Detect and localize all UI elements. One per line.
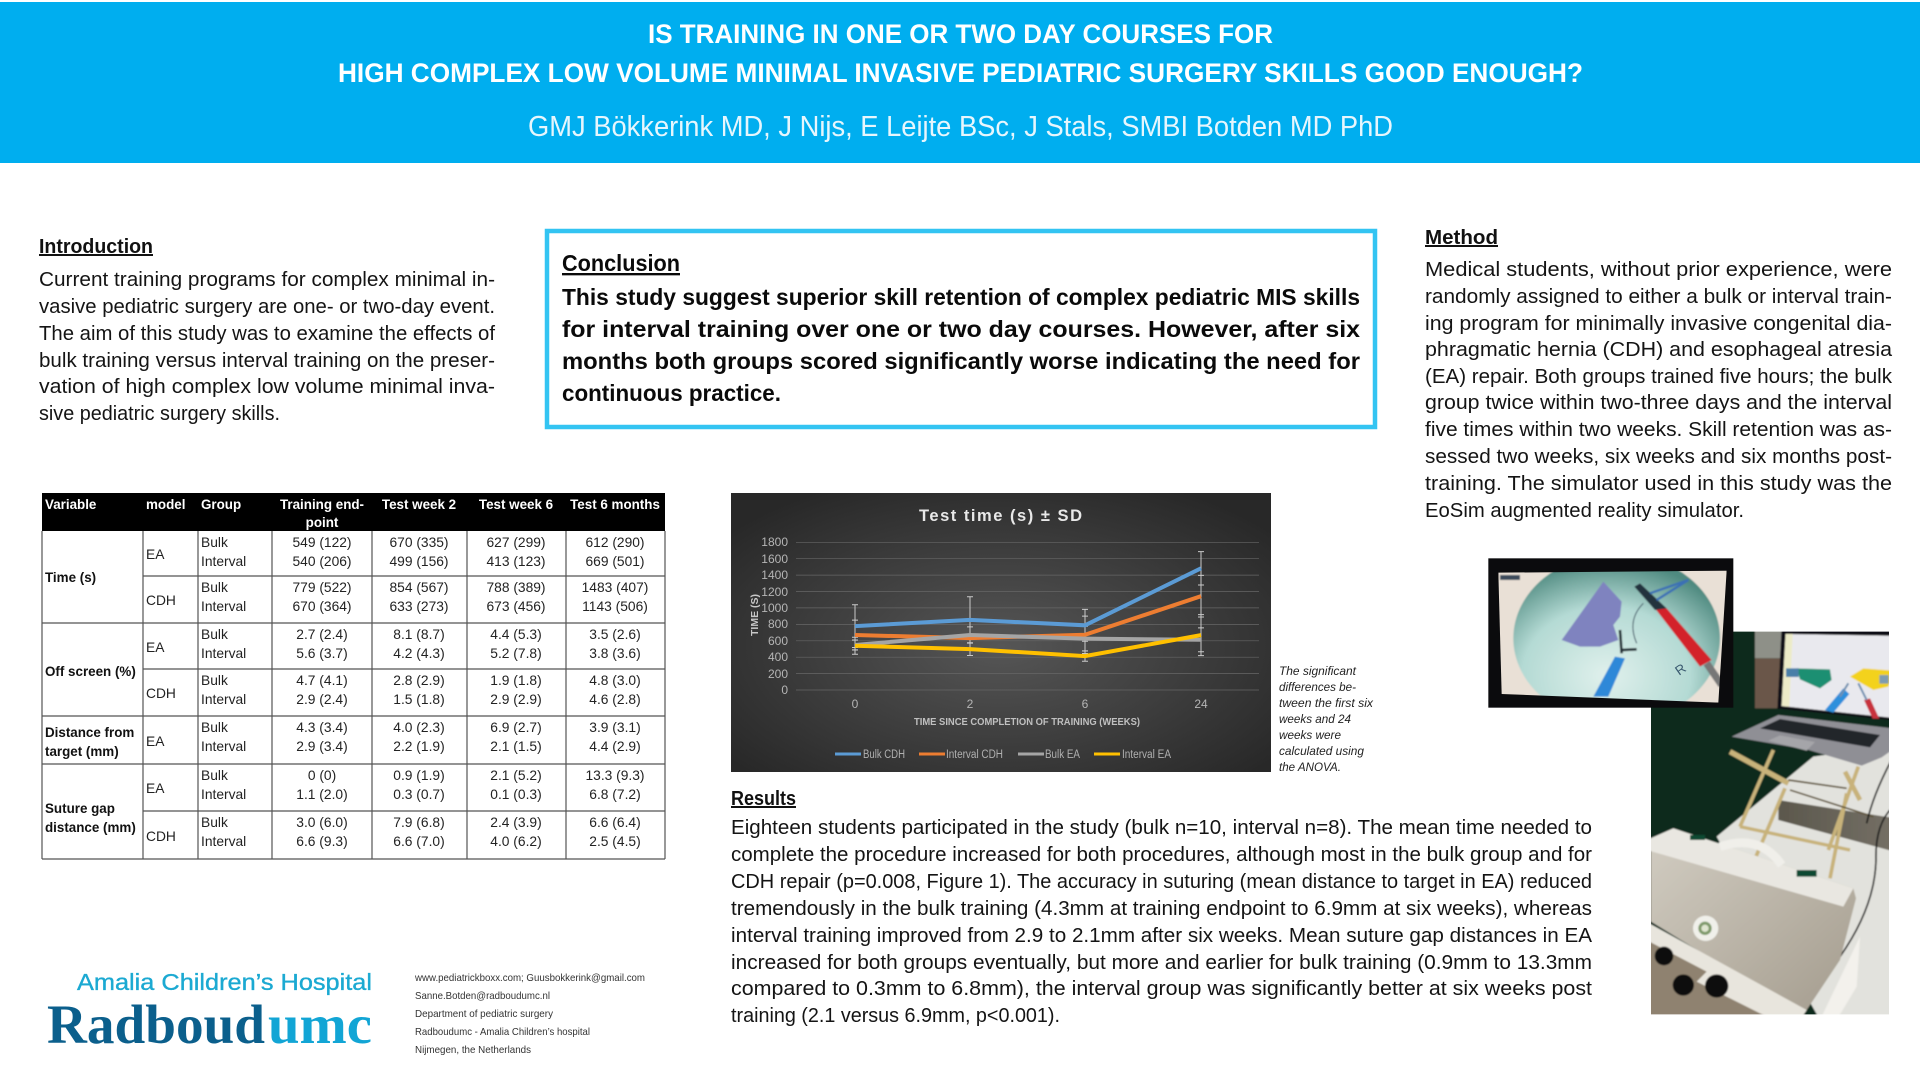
group labels: Bulk <box>201 580 228 595</box>
values: test 6 months: 6.6 (6.4) <box>589 815 641 830</box>
text block: introduction body: The aim of this study was to examine the effects of <box>39 323 495 345</box>
authors: GMJ Bökkerink MD, J Nijs, E Leijte BSc, J Stals, SMBI Botden MD PhD <box>528 111 1393 143</box>
group labels: Bulk <box>201 720 228 735</box>
values: test week 2: 0.9 (1.9) <box>393 768 445 783</box>
values: test week 2: 670 (335) <box>389 535 449 550</box>
chart caption: the ANOVA. <box>1279 760 1341 774</box>
model labels: EA <box>146 781 165 796</box>
model labels: EA <box>146 640 165 655</box>
chart caption <box>1279 664 1374 774</box>
y axis title: TIME (S) <box>749 594 761 636</box>
group labels: Interval <box>201 599 246 614</box>
values: training end-point: 2.9 (2.4) <box>296 692 348 707</box>
chart caption: differences be- <box>1279 680 1356 694</box>
text block: method body: Medical students, without prior experience, were <box>1425 259 1892 281</box>
table header: Variable <box>45 497 96 512</box>
text block: method body: five times within two weeks. Skill retention was as- <box>1425 419 1892 441</box>
text block: introduction body <box>39 269 495 425</box>
values: test week 2: 6.6 (7.0) <box>393 834 445 849</box>
values: test week 2: 7.9 (6.8) <box>393 815 445 830</box>
text block: method body: group twice within two-three days and the interval <box>1425 392 1892 414</box>
group labels: Interval <box>201 739 246 754</box>
contact details: www.pediatrickboxx.com; Guusbokkerink@gmail.com <box>414 972 645 984</box>
values: test week 2: 499 (156) <box>389 554 449 569</box>
panel: conclusion <box>547 231 1375 427</box>
row labels: target (mm) <box>45 744 119 759</box>
contact details: Sanne.Botden@radboudumc.nl <box>415 990 550 1002</box>
values: test week 2: 2.2 (1.9) <box>393 739 445 754</box>
text block: introduction body: sive pediatric surgery skills. <box>39 403 280 425</box>
contact details <box>414 972 645 1056</box>
text block: method body <box>1425 259 1893 522</box>
chart caption: weeks were <box>1279 728 1341 742</box>
values: test week 2: 4.0 (2.3) <box>393 720 445 735</box>
row labels: Distance from <box>45 725 134 740</box>
panel: method <box>1425 227 1893 522</box>
text block: conclusion body <box>562 284 1360 406</box>
heading: method: Method <box>1425 227 1498 249</box>
y axis tick labels <box>761 535 788 697</box>
model labels: EA <box>146 547 165 562</box>
header banner <box>0 2 1920 163</box>
values: test week 6: 2.4 (3.9) <box>490 815 542 830</box>
text block: results body: increased for both groups eventually, but more and earlier for bulk training (0.9mm to 13.3mm <box>731 952 1592 974</box>
chart caption: calculated using <box>1279 744 1364 758</box>
chart caption: weeks and 24 <box>1279 712 1351 726</box>
values: test week 2: 633 (273) <box>389 599 449 614</box>
text block: method body: phragmatic hernia (CDH) and esophageal atresia <box>1425 339 1893 361</box>
y axis tick labels: 600 <box>768 634 788 648</box>
row labels: Off screen (%) <box>45 664 136 679</box>
group labels: Interval <box>201 834 246 849</box>
group labels: Bulk <box>201 768 228 783</box>
logo: Amalia Children's Hospital Radboudumc: Radboud <box>47 994 265 1055</box>
series: interval CDH <box>855 596 1201 638</box>
photo: augmented reality monitor view <box>1488 558 1734 708</box>
values: test week 6: 4.4 (5.3) <box>490 627 542 642</box>
table header: point <box>306 515 339 530</box>
group labels: Bulk <box>201 627 228 642</box>
text block: results body <box>731 817 1593 1027</box>
values: test week 2: 8.1 (8.7) <box>393 627 445 642</box>
values: test week 6: 1.9 (1.8) <box>490 673 542 688</box>
values: test 6 months: 1143 (506) <box>582 599 648 614</box>
group labels <box>201 535 246 849</box>
values: training end-point: 0 (0) <box>308 768 336 783</box>
values: test 6 months: 4.8 (3.0) <box>589 673 641 688</box>
series: bulk EA <box>855 635 1201 645</box>
contact details: Department of pediatric surgery <box>415 1008 554 1020</box>
row labels: distance (mm) <box>45 820 136 835</box>
y axis tick labels: 1000 <box>761 601 788 615</box>
model labels: CDH <box>146 593 176 608</box>
logo: Amalia Children's Hospital Radboudumc: umc <box>268 994 372 1055</box>
values: test 6 months: 3.8 (3.6) <box>589 646 641 661</box>
panel: results <box>731 788 1593 1027</box>
legend: Interval EA <box>1122 749 1171 761</box>
text block: method body: ing program for minimally invasive congenital dia- <box>1425 313 1892 335</box>
text block: results body: complete the procedure increased for both procedures, although most in the bulk group and for <box>731 844 1592 866</box>
x axis title: TIME SINCE COMPLETION OF TRAINING (WEEKS) <box>914 716 1140 728</box>
table header: Test 6 months <box>570 497 660 512</box>
y axis tick labels: 400 <box>768 650 788 664</box>
logo: Amalia Children's Hospital Radboudumc <box>47 969 372 1055</box>
values: training end-point: 4.3 (3.4) <box>296 720 348 735</box>
values: test 6 months <box>582 535 648 849</box>
text block: conclusion body: months both groups scored significantly worse indicating the need for <box>562 348 1360 374</box>
values: test week 6: 0.1 (0.3) <box>490 787 542 802</box>
values: training end-point: 779 (522) <box>292 580 352 595</box>
text block: introduction body: Current training programs for complex minimal in- <box>39 269 495 291</box>
values: test 6 months: 2.5 (4.5) <box>589 834 641 849</box>
text block: results body: tremendously in the bulk training (4.3mm at training endpoint to 6.9mm at six weeks), whereas <box>731 898 1592 920</box>
values: test 6 months: 4.6 (2.8) <box>589 692 641 707</box>
group labels: Bulk <box>201 535 228 550</box>
text block: introduction body: bulk training versus interval training on the preser- <box>39 350 495 372</box>
values: test week 6: 673 (456) <box>486 599 546 614</box>
y axis tick labels: 1400 <box>761 568 788 582</box>
heading: conclusion: Conclusion <box>562 250 680 276</box>
values: training end-point <box>292 535 352 849</box>
x axis tick labels: 0 <box>852 697 859 711</box>
x axis tick labels <box>852 697 1208 711</box>
y axis tick labels: 200 <box>768 667 788 681</box>
legend: Bulk EA <box>1045 749 1080 761</box>
text block: introduction body: vasive pediatric surgery are one- or two-day event. <box>39 296 495 318</box>
text block: conclusion body: for interval training over one or two day courses. However, after six <box>562 316 1360 342</box>
table header: Test week 2 <box>382 497 456 512</box>
table header <box>45 497 660 530</box>
values: test week 6: 6.9 (2.7) <box>490 720 542 735</box>
chart caption: The significant <box>1279 664 1357 678</box>
values: test week 2: 4.2 (4.3) <box>393 646 445 661</box>
values: test week 2: 0.3 (0.7) <box>393 787 445 802</box>
table header: model <box>146 497 185 512</box>
values: test week 2: 854 (567) <box>389 580 449 595</box>
row labels: Suture gap <box>45 801 115 816</box>
x axis tick labels: 24 <box>1194 697 1208 711</box>
values: test week 6 <box>486 535 546 849</box>
values: test week 6: 788 (389) <box>486 580 546 595</box>
heading: introduction: Introduction <box>39 236 153 258</box>
values: test week 2: 2.8 (2.9) <box>393 673 445 688</box>
values: test week 2: 1.5 (1.8) <box>393 692 445 707</box>
values: test week 2 <box>389 535 449 849</box>
values: training end-point: 549 (122) <box>292 535 352 550</box>
group labels: Interval <box>201 787 246 802</box>
label on the simulated instrument: R <box>1672 660 1689 678</box>
values: test 6 months: 4.4 (2.9) <box>589 739 641 754</box>
group labels: Bulk <box>201 815 228 830</box>
legend: Interval CDH <box>946 749 1003 761</box>
photo: simulator setup with laptop <box>1640 620 1907 1020</box>
values: test 6 months: 3.9 (3.1) <box>589 720 641 735</box>
values: test 6 months: 6.8 (7.2) <box>589 787 641 802</box>
text block: method body: EoSim augmented reality simulator. <box>1425 500 1744 522</box>
text block: method body: (EA) repair. Both groups trained five hours; the bulk <box>1425 366 1893 388</box>
error bars <box>852 552 1204 661</box>
table header: Test week 6 <box>479 497 553 512</box>
values: training end-point: 3.0 (6.0) <box>296 815 348 830</box>
group labels: Interval <box>201 646 246 661</box>
group labels: Bulk <box>201 673 228 688</box>
legend: Bulk CDH <box>863 749 905 761</box>
table: results by variable, model and group <box>42 493 665 859</box>
text block: results body: CDH repair (p=0.008, Figure 1). The accuracy in suturing (mean distance to target in EA) reduced <box>731 871 1592 893</box>
values: test 6 months: 612 (290) <box>585 535 645 550</box>
text block: results body: training (2.1 versus 6.9mm, p<0.001). <box>731 1005 1060 1027</box>
title: IS TRAINING IN ONE OR TWO DAY COURSES FOR <box>648 19 1273 49</box>
logo: Amalia Children's Hospital Radboudumc: Amalia Children’s Hospital <box>77 969 372 995</box>
text block: results body: compared to 0.3mm to 6.8mm), the interval group was significantly better at six weeks post <box>731 978 1592 1000</box>
text block: conclusion body: This study suggest superior skill retention of complex pediatric MIS skills <box>562 284 1360 310</box>
text block: introduction body: vation of high complex low volume minimal inva- <box>39 376 495 398</box>
contact details: Nijmegen, the Netherlands <box>415 1044 531 1056</box>
heading: results: Results <box>731 788 796 810</box>
table header: Group <box>201 497 241 512</box>
x axis tick labels: 2 <box>967 697 974 711</box>
values: test 6 months: 3.5 (2.6) <box>589 627 641 642</box>
values: training end-point: 4.7 (4.1) <box>296 673 348 688</box>
model labels: EA <box>146 734 165 749</box>
values: test week 6: 4.0 (6.2) <box>490 834 542 849</box>
text block: conclusion body: continuous practice. <box>562 380 781 406</box>
values: training end-point: 6.6 (9.3) <box>296 834 348 849</box>
legend <box>835 749 1171 761</box>
panel: introduction <box>39 236 495 425</box>
values: test 6 months: 669 (501) <box>585 554 645 569</box>
values: test week 6: 2.1 (1.5) <box>490 739 542 754</box>
values: training end-point: 2.9 (3.4) <box>296 739 348 754</box>
values: training end-point: 1.1 (2.0) <box>296 787 348 802</box>
text block: results body: interval training improved from 2.9 to 2.1mm after six weeks. Mean suture gap distances in EA <box>731 925 1593 947</box>
values: training end-point: 670 (364) <box>292 599 352 614</box>
values: training end-point: 540 (206) <box>292 554 352 569</box>
x axis tick labels: 6 <box>1082 697 1089 711</box>
title: HIGH COMPLEX LOW VOLUME MINIMAL INVASIVE PEDIATRIC SURGERY SKILLS GOOD ENOUGH? <box>338 58 1583 88</box>
contact details: Radboudumc - Amalia Children’s hospital <box>415 1026 590 1038</box>
values: training end-point: 5.6 (3.7) <box>296 646 348 661</box>
text block: method body: sessed two weeks, six weeks and six months post- <box>1425 446 1892 468</box>
model labels: CDH <box>146 686 176 701</box>
values: test week 6: 5.2 (7.8) <box>490 646 542 661</box>
group labels: Interval <box>201 554 246 569</box>
model labels <box>146 547 176 844</box>
text block: results body: Eighteen students participated in the study (bulk n=10, interval n=8). The mean time needed to <box>731 817 1592 839</box>
values: test week 6: 2.9 (2.9) <box>490 692 542 707</box>
group labels: Interval <box>201 692 246 707</box>
values: training end-point: 2.7 (2.4) <box>296 627 348 642</box>
table header: Training end- <box>280 497 364 512</box>
values: test 6 months: 1483 (407) <box>582 580 648 595</box>
text block: method body: training. The simulator used in this study was the <box>1425 473 1892 495</box>
y axis tick labels: 1200 <box>761 585 788 599</box>
values: test week 6: 413 (123) <box>486 554 546 569</box>
y axis tick labels: 1800 <box>761 535 788 549</box>
line chart: test time <box>731 493 1271 772</box>
values: test 6 months: 13.3 (9.3) <box>585 768 645 783</box>
row labels: Time (s) <box>45 570 96 585</box>
chart title: Test time (s) ± SD <box>919 507 1082 525</box>
values: test week 6: 627 (299) <box>486 535 546 550</box>
model labels: CDH <box>146 829 176 844</box>
y axis tick labels: 0 <box>781 683 788 697</box>
title <box>338 19 1583 88</box>
chart caption: tween the first six <box>1279 696 1374 710</box>
y axis tick labels: 800 <box>768 617 788 631</box>
text block: method body: randomly assigned to either a bulk or interval train- <box>1425 286 1892 308</box>
series: bulk CDH <box>855 568 1201 626</box>
row labels <box>45 570 136 835</box>
values: test week 6: 2.1 (5.2) <box>490 768 542 783</box>
series: interval EA <box>855 635 1201 656</box>
y axis tick labels: 1600 <box>761 552 788 566</box>
